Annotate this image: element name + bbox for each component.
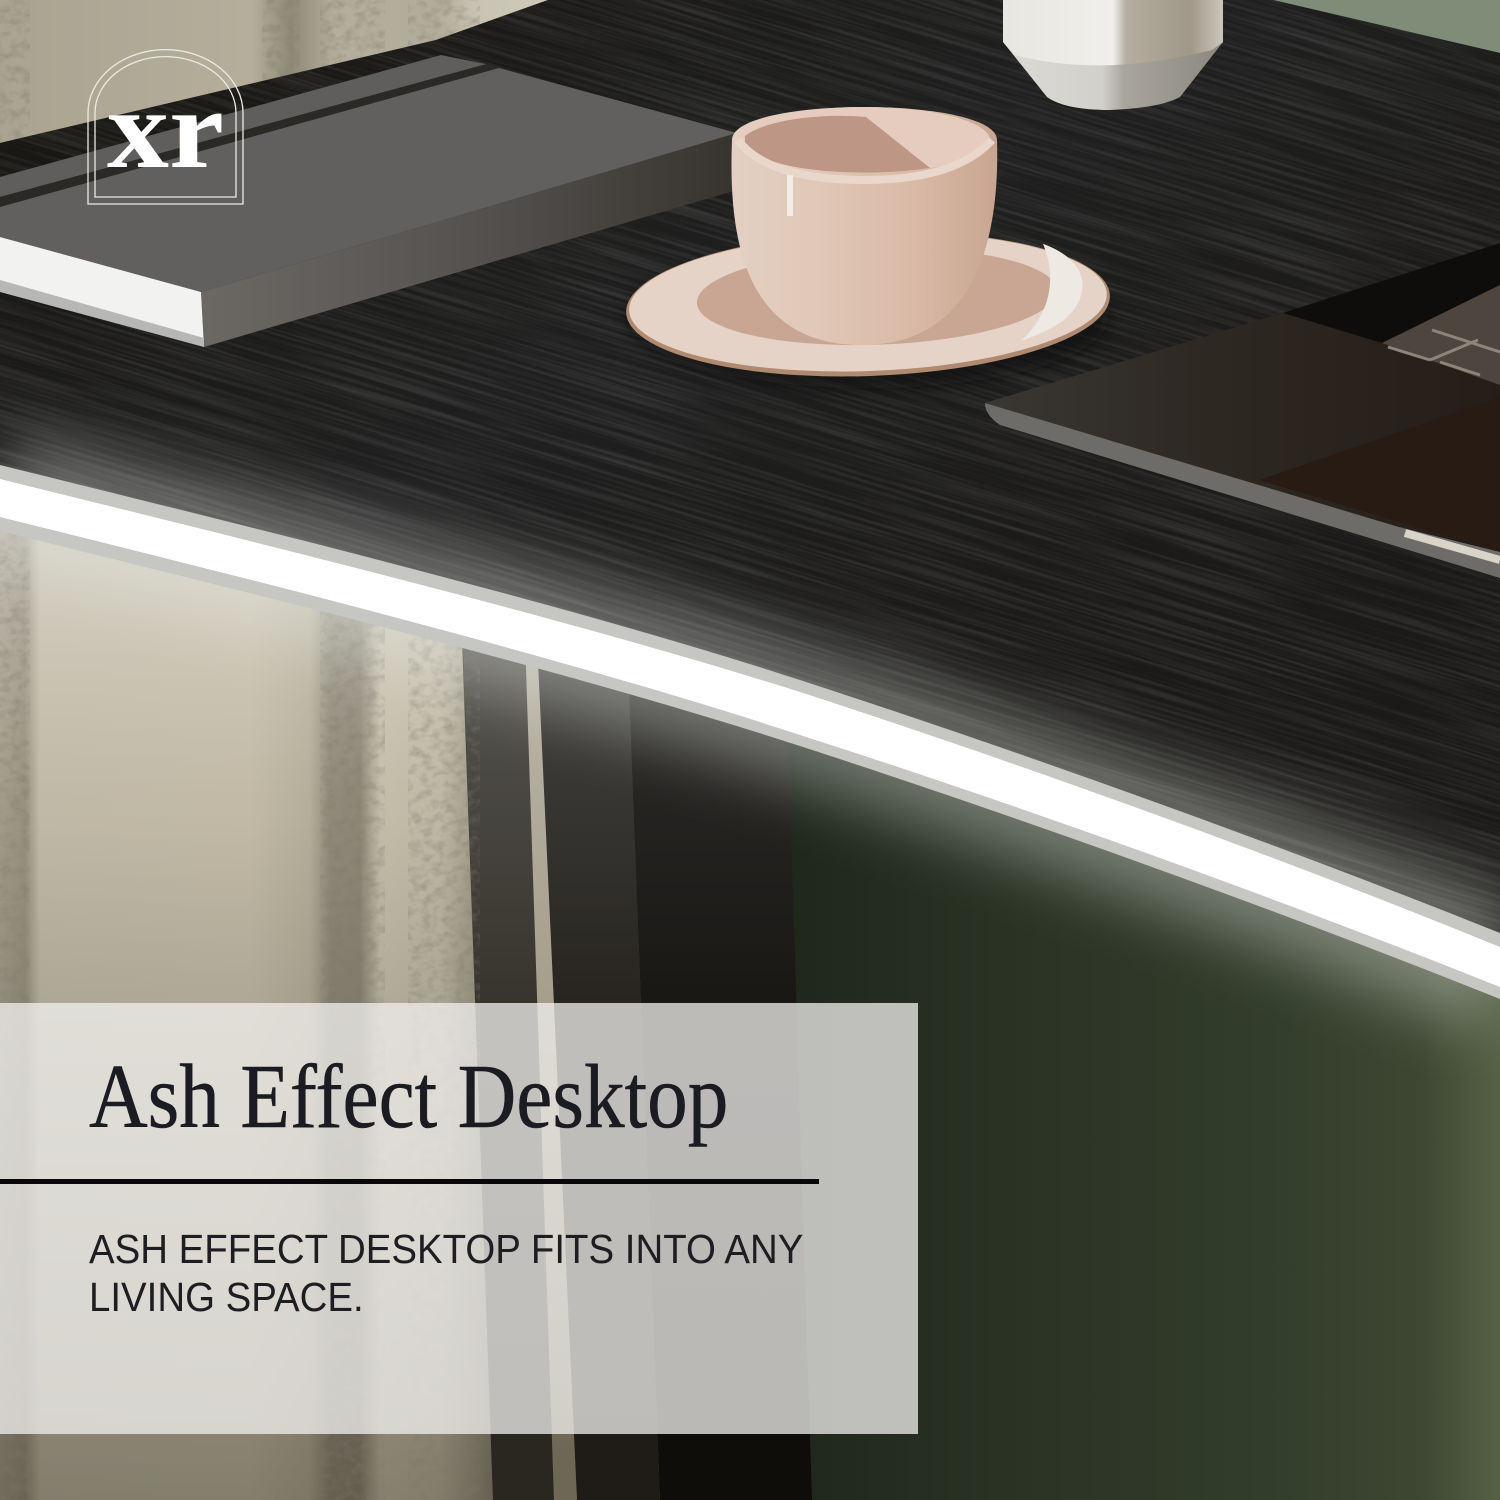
top curtain: [0, 0, 548, 143]
body text: ASH EFFECT DESKTOP FITS INTO ANY: [89, 1226, 803, 1272]
wall green: [785, 700, 1500, 1500]
saucer shadow: [628, 248, 1108, 388]
narrow curtain strip: [525, 640, 577, 1500]
logo: xr arch: xr: [107, 68, 224, 192]
curtain weave texture: [0, 0, 480, 1500]
vase: [1003, 0, 1223, 110]
logo: xr arch: [87, 49, 244, 205]
LED strip: [0, 465, 1500, 999]
heading: Ash Effect Desktop: [89, 1046, 728, 1147]
desk top surface: [0, 0, 1500, 966]
book: [0, 55, 737, 347]
body text: [89, 1226, 803, 1320]
curtain shading: [0, 480, 493, 1500]
body text: LIVING SPACE.: [89, 1274, 364, 1320]
dark column left: [537, 640, 660, 1500]
dark strip beside curtain: [462, 620, 554, 1500]
saucer: [624, 224, 1112, 384]
green wall top right: [1273, 0, 1500, 53]
cup: [731, 107, 997, 345]
text panel: [0, 1003, 918, 1434]
divider line: [0, 1179, 819, 1184]
LED glow: [0, 498, 1500, 966]
lower curtain: [0, 480, 493, 1500]
wood grain: [0, 0, 1500, 966]
dark column right: [627, 640, 812, 1500]
laptop: [985, 243, 1500, 578]
